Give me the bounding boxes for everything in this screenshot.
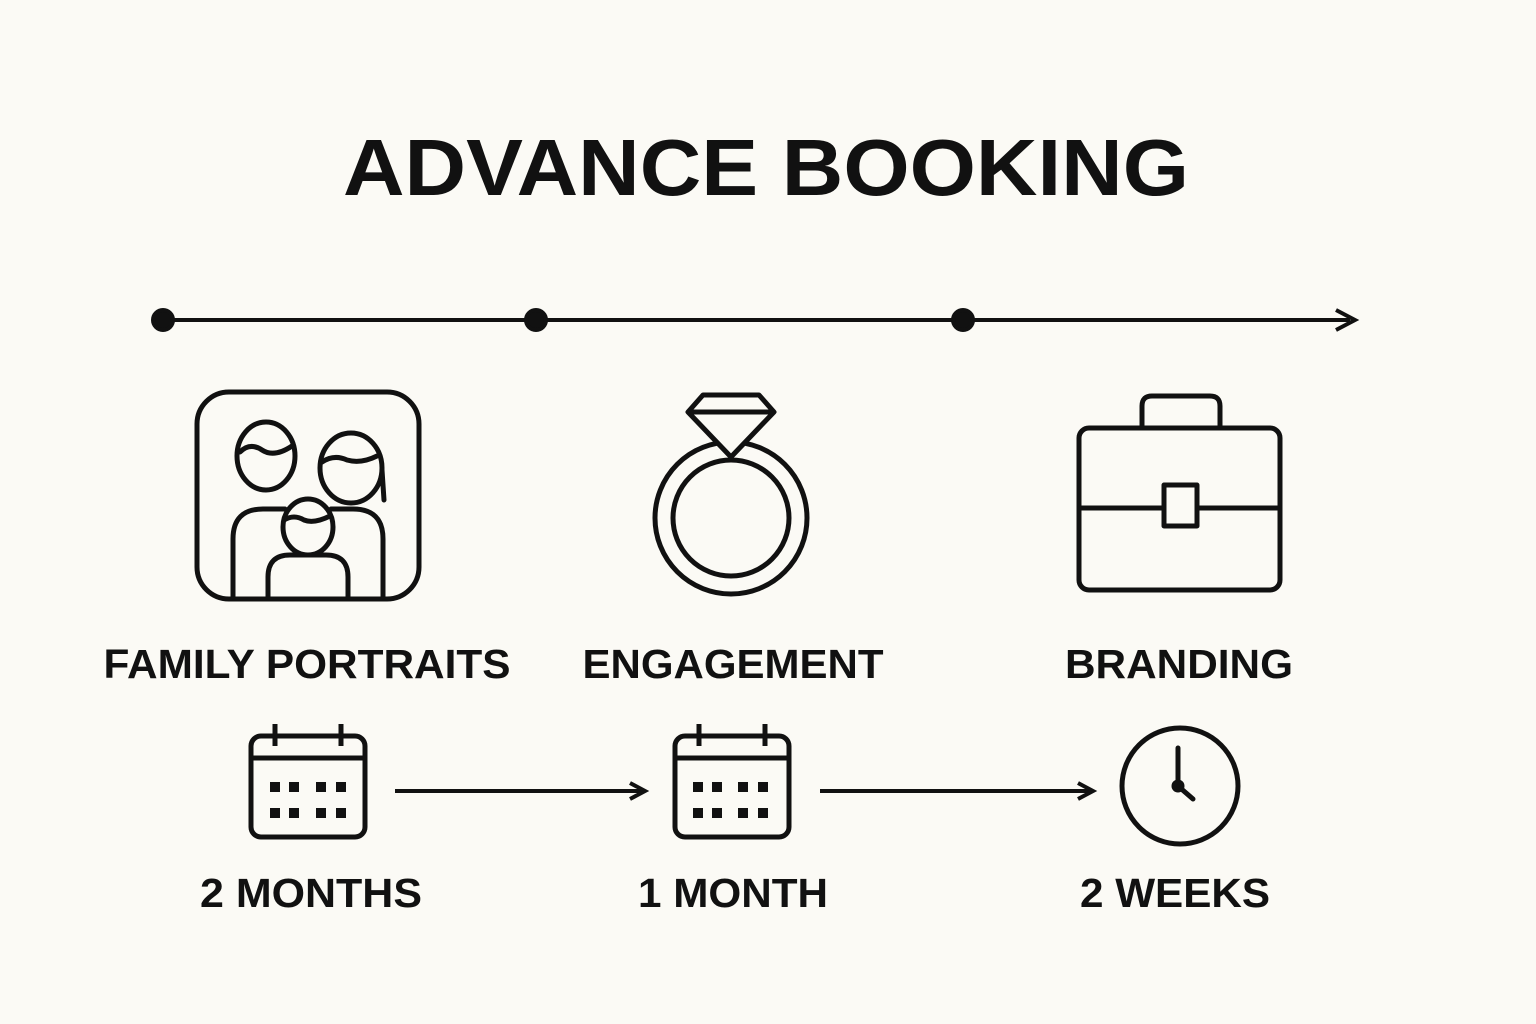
icon: calendar 2 [675,724,789,837]
label: engagement: ENGAGEMENT [582,641,884,687]
label: branding: BRANDING [1065,641,1293,687]
icon: calendar 1 [251,724,365,837]
arrow 2 [820,783,1093,799]
icon: family portraits [197,392,419,599]
icon: engagement ring [655,395,807,594]
label: 2 weeks: 2 WEEKS [1080,870,1270,916]
timeline arrow [153,310,1355,330]
label: family portraits: FAMILY PORTRAITS [104,641,511,687]
label: 1 month: 1 MONTH [638,870,828,916]
icon: briefcase [1079,396,1280,590]
arrow 1 [395,783,645,799]
title: ADVANCE BOOKING [343,123,1189,212]
icon: clock [1122,728,1238,844]
label: 2 months: 2 MONTHS [200,870,422,916]
